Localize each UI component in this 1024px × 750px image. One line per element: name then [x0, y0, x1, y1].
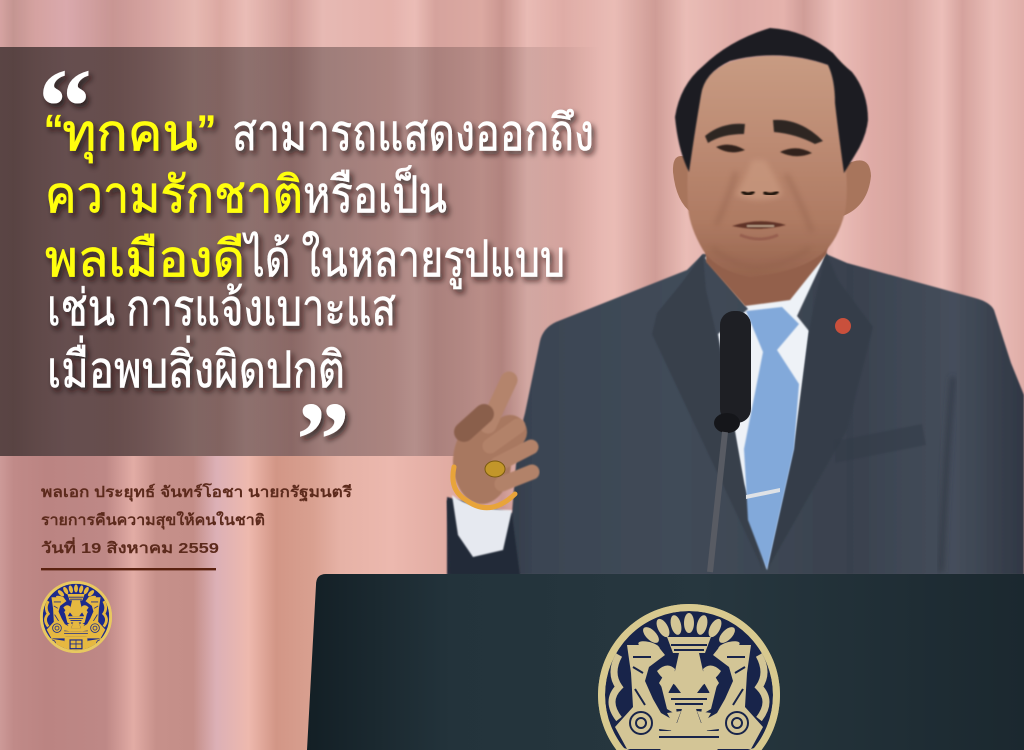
eyebrows	[705, 120, 823, 144]
line 3	[45, 231, 565, 289]
line 3: ได้ ในหลายรูปแบบ	[242, 231, 565, 289]
line 3: พลเมืองดี	[45, 231, 245, 287]
line 2	[45, 165, 447, 223]
shirt cuff	[452, 495, 512, 557]
hair	[675, 28, 868, 173]
podium emblem	[598, 604, 780, 750]
quote text	[38, 48, 594, 500]
tie	[744, 307, 799, 570]
line 1: สามารถแสดงออกถึง	[232, 105, 594, 161]
microphone	[710, 311, 751, 572]
neck	[705, 215, 835, 306]
divider line	[41, 568, 216, 570]
lapel pin	[835, 318, 851, 334]
wristband	[453, 467, 515, 508]
line 2: หรือเป็น	[303, 165, 447, 223]
eyes	[716, 145, 812, 156]
date: วันที่ 19 สิงหาคม 2559	[41, 537, 219, 557]
sleeve crease	[941, 377, 953, 572]
opening quotation mark: “	[38, 48, 92, 167]
podium	[307, 574, 1024, 750]
face	[687, 56, 847, 277]
mouth	[732, 221, 786, 239]
tie clip	[746, 488, 780, 499]
dark translucent quote panel	[0, 47, 600, 456]
lapel left	[652, 254, 763, 570]
line 1	[45, 105, 594, 163]
programme name: รายการคืนความสุขให้คนในชาติ	[41, 511, 265, 530]
speaker name: พลเอก ประยุทธ์ จันทร์โอชา นายกรัฐมนตรี	[41, 482, 353, 502]
closing quotation mark: ”	[296, 381, 350, 500]
sleeve shading left	[447, 500, 520, 575]
shirt collar and front	[705, 240, 826, 570]
attribution text	[41, 482, 353, 557]
government seal logo	[40, 581, 112, 653]
line 5: เมื่อพบสิ่งผิดปกติ	[47, 336, 345, 398]
hand	[453, 380, 532, 504]
ears	[673, 156, 692, 213]
gold ring	[485, 461, 505, 477]
nose	[735, 160, 783, 200]
lapel right	[767, 252, 873, 570]
breast pocket	[835, 424, 926, 463]
line 2: ความรักชาติ	[45, 167, 303, 223]
cheek shading	[712, 172, 812, 268]
speaker: prime minister	[447, 28, 1024, 575]
suit jacket	[447, 254, 1024, 575]
line 4: เช่น การแจ้งเบาะแส	[47, 280, 396, 336]
line 1: “ทุกคน”	[45, 105, 215, 163]
